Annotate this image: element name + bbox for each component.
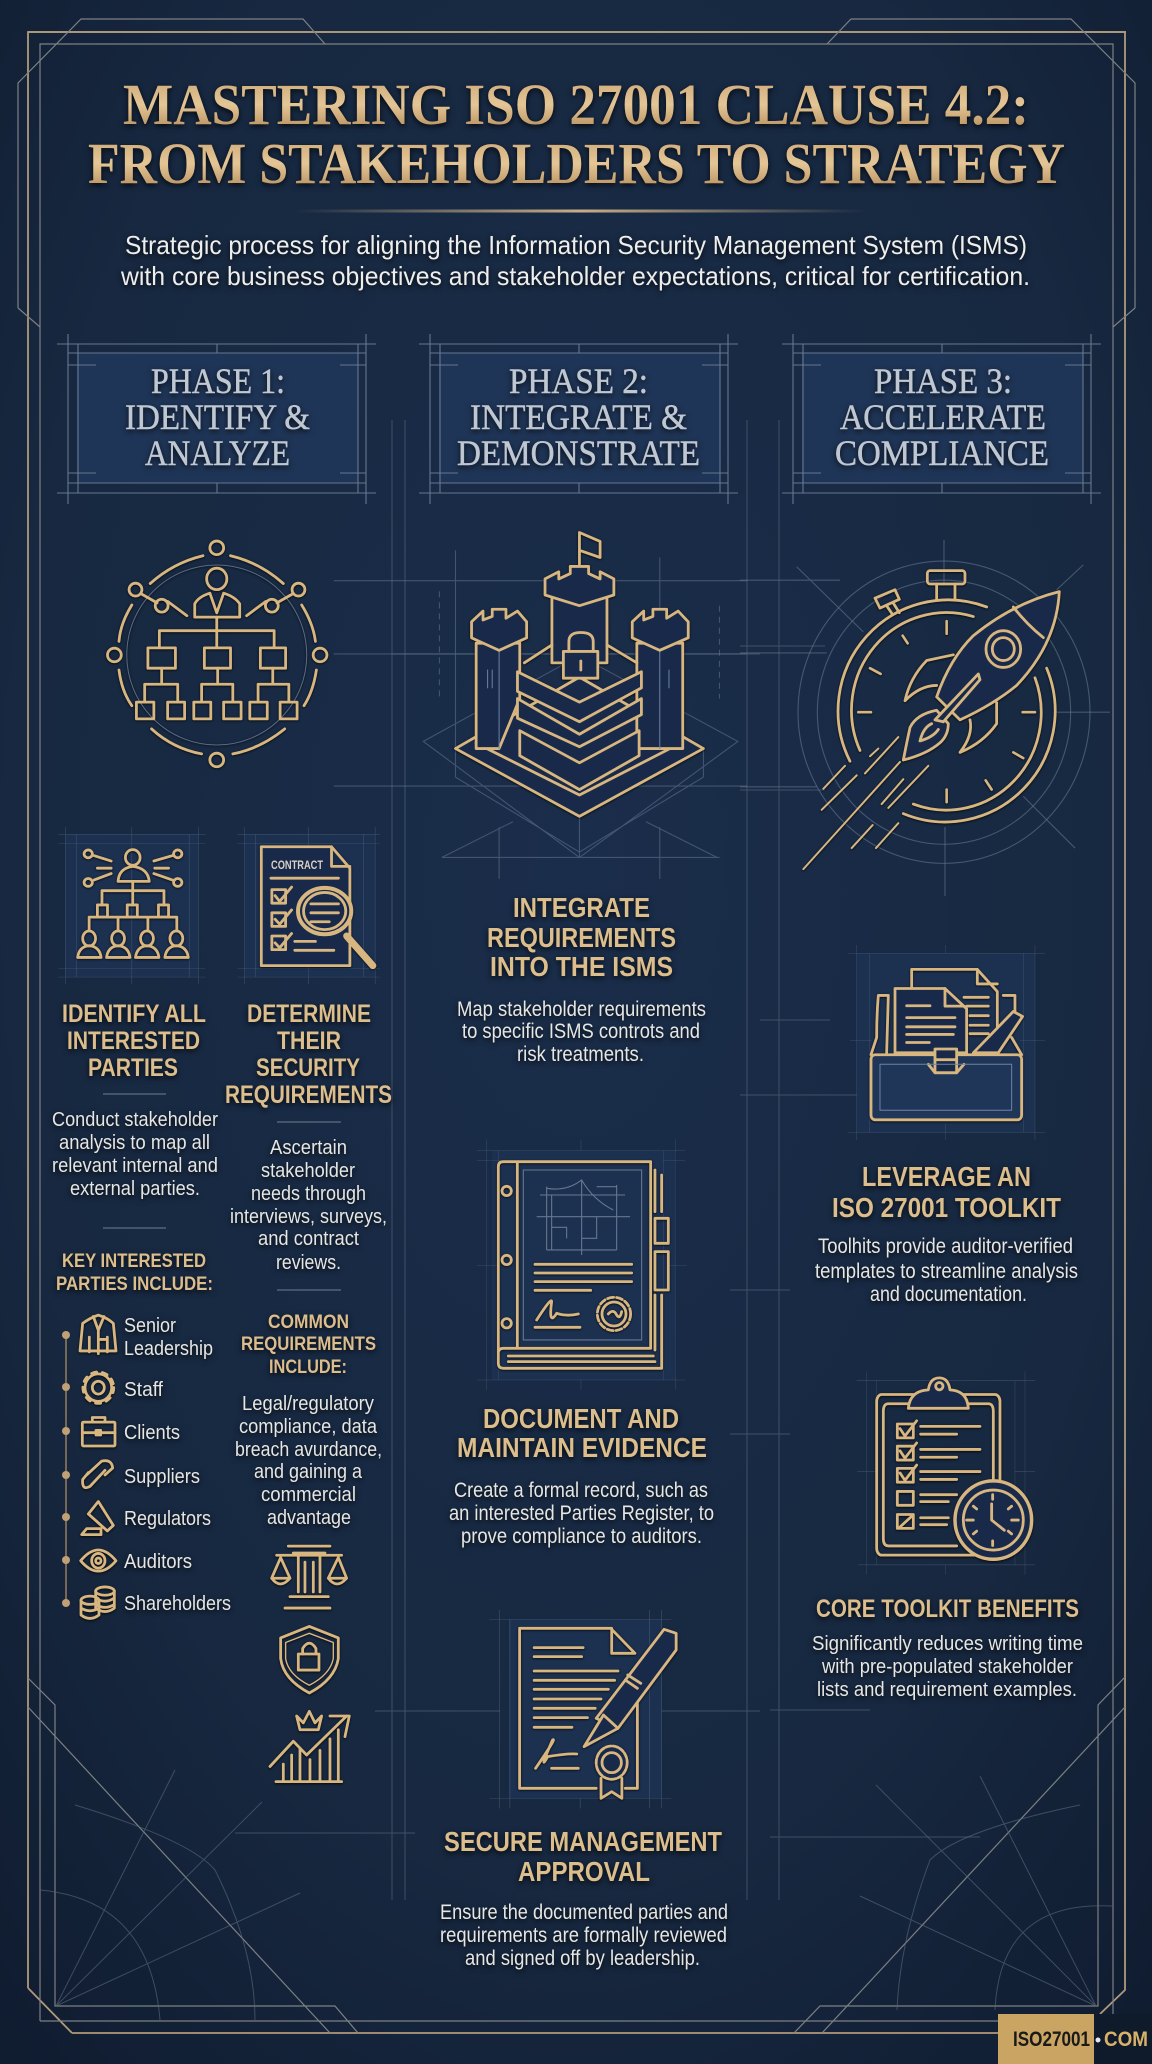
text: common requirements: compliance, data [239,1416,378,1438]
step heading: identify all interested parties [62,1000,206,1082]
text: common requirements: Legal/regulatory [242,1393,374,1415]
phase 2 header: DEMONSTRATE [457,433,700,473]
gold fortress [455,532,703,816]
heading: common requirements: INCLUDE: [269,1357,347,1378]
icon: toolkit box [848,945,1045,1140]
phase 1 header: ANALYZE [145,433,290,473]
icons: scales, shield, growth chart [270,1546,349,1782]
text: integrate description [457,998,706,1066]
text: determine description: Ascertain [270,1137,347,1159]
logo badge: ISO27001 [1013,2028,1090,2051]
text: toolkit description: and documentation. [870,1283,1027,1306]
rocket [803,592,1059,869]
phase 3 header: ACCELERATE [840,397,1046,437]
text: benefits description [812,1633,1083,1701]
step heading: identify all interested parties: IDENTIFY ALL [62,1000,206,1028]
text: document description: Create a formal record, such as [454,1479,708,1502]
text: benefits description: with pre-populated stakeholder [821,1656,1073,1678]
text: integrate description: risk treatments. [517,1043,644,1066]
icon: interested parties card [58,827,205,984]
heading: key interested parties [56,1251,213,1295]
text: identify description: external parties. [70,1178,200,1200]
heading: leverage toolkit [832,1161,1061,1223]
icon: stopwatch and rocket [740,540,1110,896]
phase 1 header: PHASE 1: [151,361,285,401]
text: identify description: analysis to map all [59,1132,210,1154]
heading: document and maintain evidence: DOCUMENT AND [483,1403,679,1434]
text: determine description: interviews, surveys, [230,1206,387,1228]
panel: interested parties list [62,1315,231,1618]
heading: secure management approval: APPROVAL [518,1856,650,1887]
heading: document and maintain evidence: MAINTAIN EVIDENCE [457,1432,707,1463]
step heading: determine security requirements: REQUIREMENTS [225,1081,392,1109]
text: document description [449,1479,714,1548]
phase 1 header: IDENTIFY & [125,397,310,437]
list labels: Auditors [124,1551,192,1573]
list labels [124,1315,231,1615]
phase 3 header: PHASE 3: [874,361,1012,401]
text: identify description: Conduct stakeholder [52,1109,218,1131]
heading: core toolkit benefits: CORE TOOLKIT BENEFITS [816,1595,1079,1623]
heading: key interested parties: KEY INTERESTED [62,1251,206,1272]
step heading: identify all interested parties: PARTIES [88,1054,178,1082]
step heading: determine security requirements: THEIR [277,1027,341,1055]
step heading: determine security requirements [225,1000,392,1109]
text: approval description [440,1901,728,1970]
list labels: Suppliers [124,1466,200,1488]
title: MASTERING ISO 27001 CLAUSE 4.2: [123,72,1029,137]
heading: integrate requirements: INTEGRATE [513,892,650,923]
text: toolkit description: Toolhits provide auditor-verified [818,1235,1073,1258]
phase 2 header: INTEGRATE & [470,397,687,437]
title [88,72,1065,196]
subtitle: with core business objectives and stakeholder expectations, critical for certification. [120,261,1030,291]
logo badge: COM [1104,2028,1148,2051]
stopwatch [838,571,1055,822]
icon: evidence binder [477,1139,687,1390]
icon: contract card [237,827,380,984]
text: determine description: and contract [258,1228,359,1250]
text: approval description: requirements are formally reviewed [440,1924,727,1947]
text: toolkit description: templates to streamline analysis [815,1260,1078,1283]
dividers [103,1094,341,1290]
heading: secure management approval [444,1826,722,1887]
phase 1 header [57,334,376,504]
blueprint column lines [235,420,980,1900]
text: common requirements [235,1393,382,1529]
icon: signed approval document [490,1610,676,1808]
list labels: Shareholders [124,1593,231,1615]
text: determine description: reviews. [276,1252,341,1274]
heading: common requirements: COMMON [268,1312,349,1333]
text: common requirements: commercial [261,1484,356,1506]
step heading: identify all interested parties: INTERESTED [67,1027,200,1055]
text: determine description: stakeholder [261,1160,355,1182]
step heading: determine security requirements: DETERMINE [247,1000,371,1028]
text: common requirements: advantage [267,1507,351,1529]
text: integrate description: to specific ISMS controts and [462,1020,700,1043]
text: benefits description: lists and requirement examples. [817,1679,1077,1701]
phase 3 header [782,334,1101,504]
list icons [80,1315,116,1618]
subtitle: Strategic process for aligning the Information Security Management System (ISMS) [125,230,1027,260]
blueprint rings [740,540,1110,896]
heading: integrate requirements: REQUIREMENTS [487,922,676,953]
text: common requirements: and gaining a [254,1461,363,1483]
phase 2 header: PHASE 2: [509,361,648,401]
heading: leverage toolkit: LEVERAGE AN [862,1161,1031,1192]
subtitle [120,230,1030,291]
step heading: determine security requirements: SECURITY [256,1054,360,1082]
icon: clipboard with clock [857,1371,1035,1575]
text: approval description: Ensure the documented parties and [440,1901,728,1924]
text: toolkit description [815,1235,1078,1306]
text: determine description: needs through [251,1183,366,1205]
heading: secure management approval: SECURE MANAGEMENT [444,1826,722,1857]
icon label: contract: CONTRACT [271,858,324,872]
text: common requirements: breach avurdance, [235,1439,382,1461]
icon: castle fortress [334,532,747,879]
heading: common requirements [241,1312,376,1378]
title: FROM STAKEHOLDERS TO STRATEGY [88,131,1065,196]
phase 3 header: COMPLIANCE [835,433,1049,473]
heading: integrate requirements: INTO THE ISMS [490,951,673,982]
heading: key interested parties: PARTIES INCLUDE: [56,1274,213,1295]
blueprint base [334,550,747,879]
heading: common requirements: REQUIREMENTS [241,1334,376,1355]
text: document description: an interested Parties Register, to [449,1502,714,1525]
text: document description: prove compliance to auditors. [461,1525,702,1548]
list labels: Regulators [124,1508,211,1530]
text: benefits description: Significantly reduces writing time [812,1633,1083,1655]
icon: stakeholder org circle [107,541,327,767]
phase 2 header [419,334,738,504]
title divider [294,210,867,212]
text: identify description: relevant internal and [52,1155,218,1177]
heading: leverage toolkit: ISO 27001 TOOLKIT [832,1192,1061,1223]
text: identify description [52,1109,218,1200]
text: integrate description: Map stakeholder requirements [457,998,706,1021]
text: approval description: and signed off by leadership. [465,1947,700,1970]
list labels: Clients [124,1422,180,1444]
heading: integrate requirements [487,892,676,982]
timeline [62,1331,70,1607]
panel: phase 1 step cards [58,827,380,984]
heading: document and maintain evidence [457,1403,707,1463]
text: determine description [230,1137,387,1274]
list labels: Leadership [124,1338,213,1360]
list labels: Staff [124,1379,163,1401]
list labels: Senior [124,1315,176,1337]
logo badge [998,2014,1152,2064]
